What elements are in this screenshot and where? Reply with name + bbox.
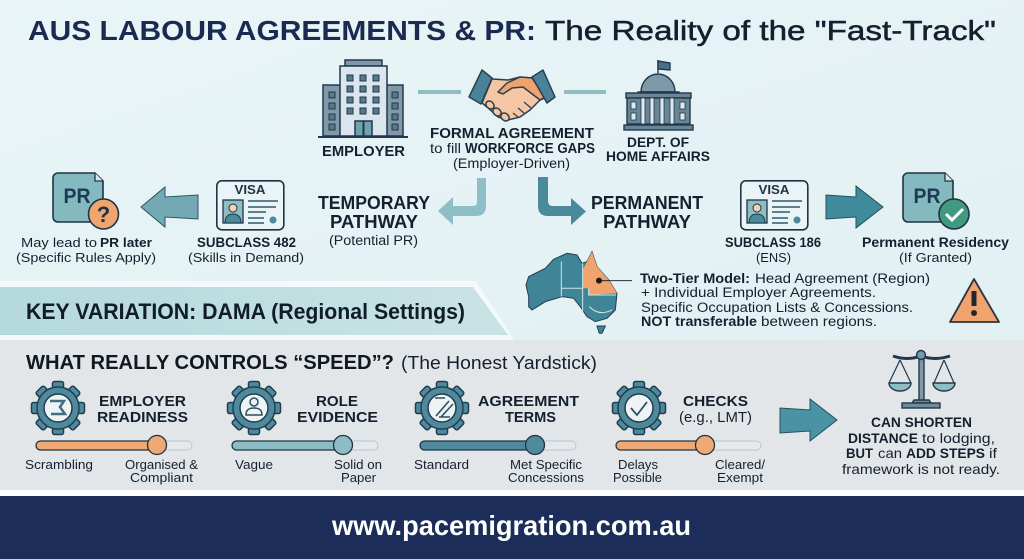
icon: visa card 482 (217, 181, 284, 230)
label: role evidence (297, 393, 378, 426)
heading: temporary pathway: TEMPORARY (318, 192, 431, 213)
heading: temporary pathway (318, 192, 431, 248)
icon: handshake (469, 70, 555, 123)
arrow: visa 186 to PR (826, 186, 883, 228)
heading: what really controls speed: WHAT REALLY CONTROLS “SPEED”? (26, 352, 394, 374)
text block: two-tier model: Head Agreement (Region) (755, 271, 930, 286)
caption: subclass 482 (188, 235, 304, 265)
label: department: DEPT. OF (627, 134, 689, 150)
icon: gear with person (228, 382, 280, 434)
control: agreement terms (414, 382, 584, 485)
label: employer readiness: EMPLOYER (99, 393, 186, 410)
caption: may lead to PR: PR later (100, 235, 152, 250)
text block: two-tier model (640, 271, 930, 329)
text block: two-tier model: NOT transferable (641, 314, 758, 329)
caption: subclass 186: SUBCLASS 186 (725, 235, 821, 250)
panel: DAMA band (0, 281, 514, 340)
agreement text: WORKFORCE GAPS (465, 141, 595, 157)
icon: government building (624, 60, 693, 130)
slider labels: Cleared/ (715, 458, 766, 472)
caption: subclass 186: (ENS) (756, 250, 791, 265)
text block: conclusion: can (878, 445, 902, 461)
label: role evidence: EVIDENCE (297, 409, 378, 426)
caption: permanent residency: (If Granted) (899, 250, 972, 265)
slider: scrambling to organised (36, 436, 192, 454)
connector lines (418, 90, 606, 94)
slider labels: Possible (613, 471, 662, 485)
label: checks: (e.g., LMT) (679, 409, 752, 426)
icon: PR document with question mark: ? (97, 202, 110, 227)
caption: may lead to PR (16, 235, 156, 265)
icon: PR document with question mark (53, 173, 118, 229)
text block: conclusion: DISTANCE (848, 430, 918, 446)
icon: gear with check (612, 382, 666, 434)
title: The Reality of the "Fast-Track" (545, 15, 996, 46)
label: agreement terms (478, 393, 579, 426)
control: role evidence (228, 382, 382, 485)
slider labels (235, 458, 382, 485)
slider labels (25, 458, 199, 485)
slider labels: Organised & (125, 458, 199, 472)
arrow: permanent pathway (538, 177, 586, 225)
icon: balance scales (889, 350, 955, 408)
slider: vague to solid (232, 436, 378, 454)
label: agreement terms: AGREEMENT (478, 393, 579, 410)
title (28, 15, 996, 46)
text block: conclusion: to lodging, (922, 430, 995, 446)
department block (606, 60, 710, 164)
caption: may lead to PR: May lead to (21, 235, 97, 250)
slider labels: Paper (341, 471, 376, 485)
heading: permanent pathway (591, 192, 704, 232)
label: checks (679, 393, 752, 426)
icon: warning triangle (950, 279, 999, 322)
text block: two-tier model: + Individual Employer Agreements. (641, 285, 876, 300)
arrow: visa 482 to PR (141, 187, 198, 227)
caption: permanent residency: Permanent Residency (862, 235, 1010, 250)
label: agreement terms: TERMS (505, 409, 556, 426)
icon: gear with arrows (32, 382, 84, 434)
label: employer readiness: READINESS (97, 409, 188, 426)
control: employer readiness (25, 382, 199, 485)
icon: visa card 186 (741, 181, 808, 230)
label: employer: EMPLOYER (322, 143, 405, 160)
text block: conclusion: ADD STEPS (906, 445, 985, 461)
label: employer readiness (97, 393, 188, 426)
heading: temporary pathway: PATHWAY (330, 211, 419, 232)
footer bar (0, 496, 1024, 559)
heading: permanent pathway: PATHWAY (603, 211, 692, 232)
text block: conclusion: CAN SHORTEN (871, 414, 972, 430)
employer block (318, 60, 408, 160)
slider labels (613, 458, 766, 485)
footer url: www.pacemigration.com.au (331, 510, 691, 541)
arrow: temporary pathway (438, 178, 486, 225)
text block: conclusion (842, 414, 1000, 477)
heading: what really controls speed: (The Honest Yardstick) (401, 352, 597, 373)
text block: two-tier model: between regions. (761, 314, 877, 329)
arrow: to conclusion (780, 399, 837, 441)
panel: what controls speed (0, 340, 1024, 490)
heading: key variation: KEY VARIATION: DAMA (Regional Settings) (26, 299, 465, 324)
slider labels: Solid on (334, 458, 382, 472)
caption: permanent residency (862, 235, 1010, 265)
slider labels: Scrambling (25, 458, 93, 472)
slider labels (414, 458, 584, 485)
label: checks: CHECKS (683, 393, 748, 410)
heading: temporary pathway: (Potential PR) (329, 233, 418, 248)
caption: may lead to PR: (Specific Rules Apply) (16, 250, 156, 265)
icon: gear with pen (416, 382, 468, 434)
caption: subclass 482: SUBCLASS 482 (197, 235, 296, 250)
slider labels: Exempt (717, 471, 764, 485)
title: AUS LABOUR AGREEMENTS & PR: (28, 15, 536, 46)
text block: conclusion: framework is not ready. (842, 461, 1000, 477)
slider labels: Delays (618, 458, 658, 472)
slider labels: Compliant (130, 471, 194, 485)
slider: standard to met (420, 436, 576, 454)
heading: what really controls speed (26, 352, 597, 374)
text block: conclusion: BUT (846, 445, 873, 461)
slider labels: Standard (414, 458, 469, 472)
control: checks (612, 382, 766, 485)
department block: HOME AFFAIRS (606, 148, 710, 164)
slider: delays to cleared (616, 436, 761, 454)
text block: two-tier model: Specific Occupation Lists & Concessions. (641, 300, 913, 315)
caption: subclass 482: (Skills in Demand) (188, 250, 304, 265)
slider labels: Vague (235, 458, 273, 472)
agreement text: to fill (430, 140, 461, 156)
icon: PR document with check (903, 173, 969, 229)
agreement text: (Employer-Driven) (453, 155, 570, 171)
slider labels: Met Specific (510, 458, 582, 472)
agreement text (430, 126, 595, 171)
icon: office building (318, 60, 408, 137)
heading: permanent pathway: PERMANENT (591, 192, 704, 213)
map: Australia (526, 252, 632, 333)
caption: subclass 186 (725, 235, 821, 265)
label: role evidence: ROLE (316, 393, 358, 410)
divider strip (0, 490, 1024, 496)
text block: conclusion: if (989, 445, 997, 461)
text block: two-tier model: Two-Tier Model: (640, 271, 750, 286)
upper panel background (0, 0, 1024, 340)
agreement text: FORMAL AGREEMENT (430, 126, 594, 142)
slider labels: Concessions (508, 471, 584, 485)
